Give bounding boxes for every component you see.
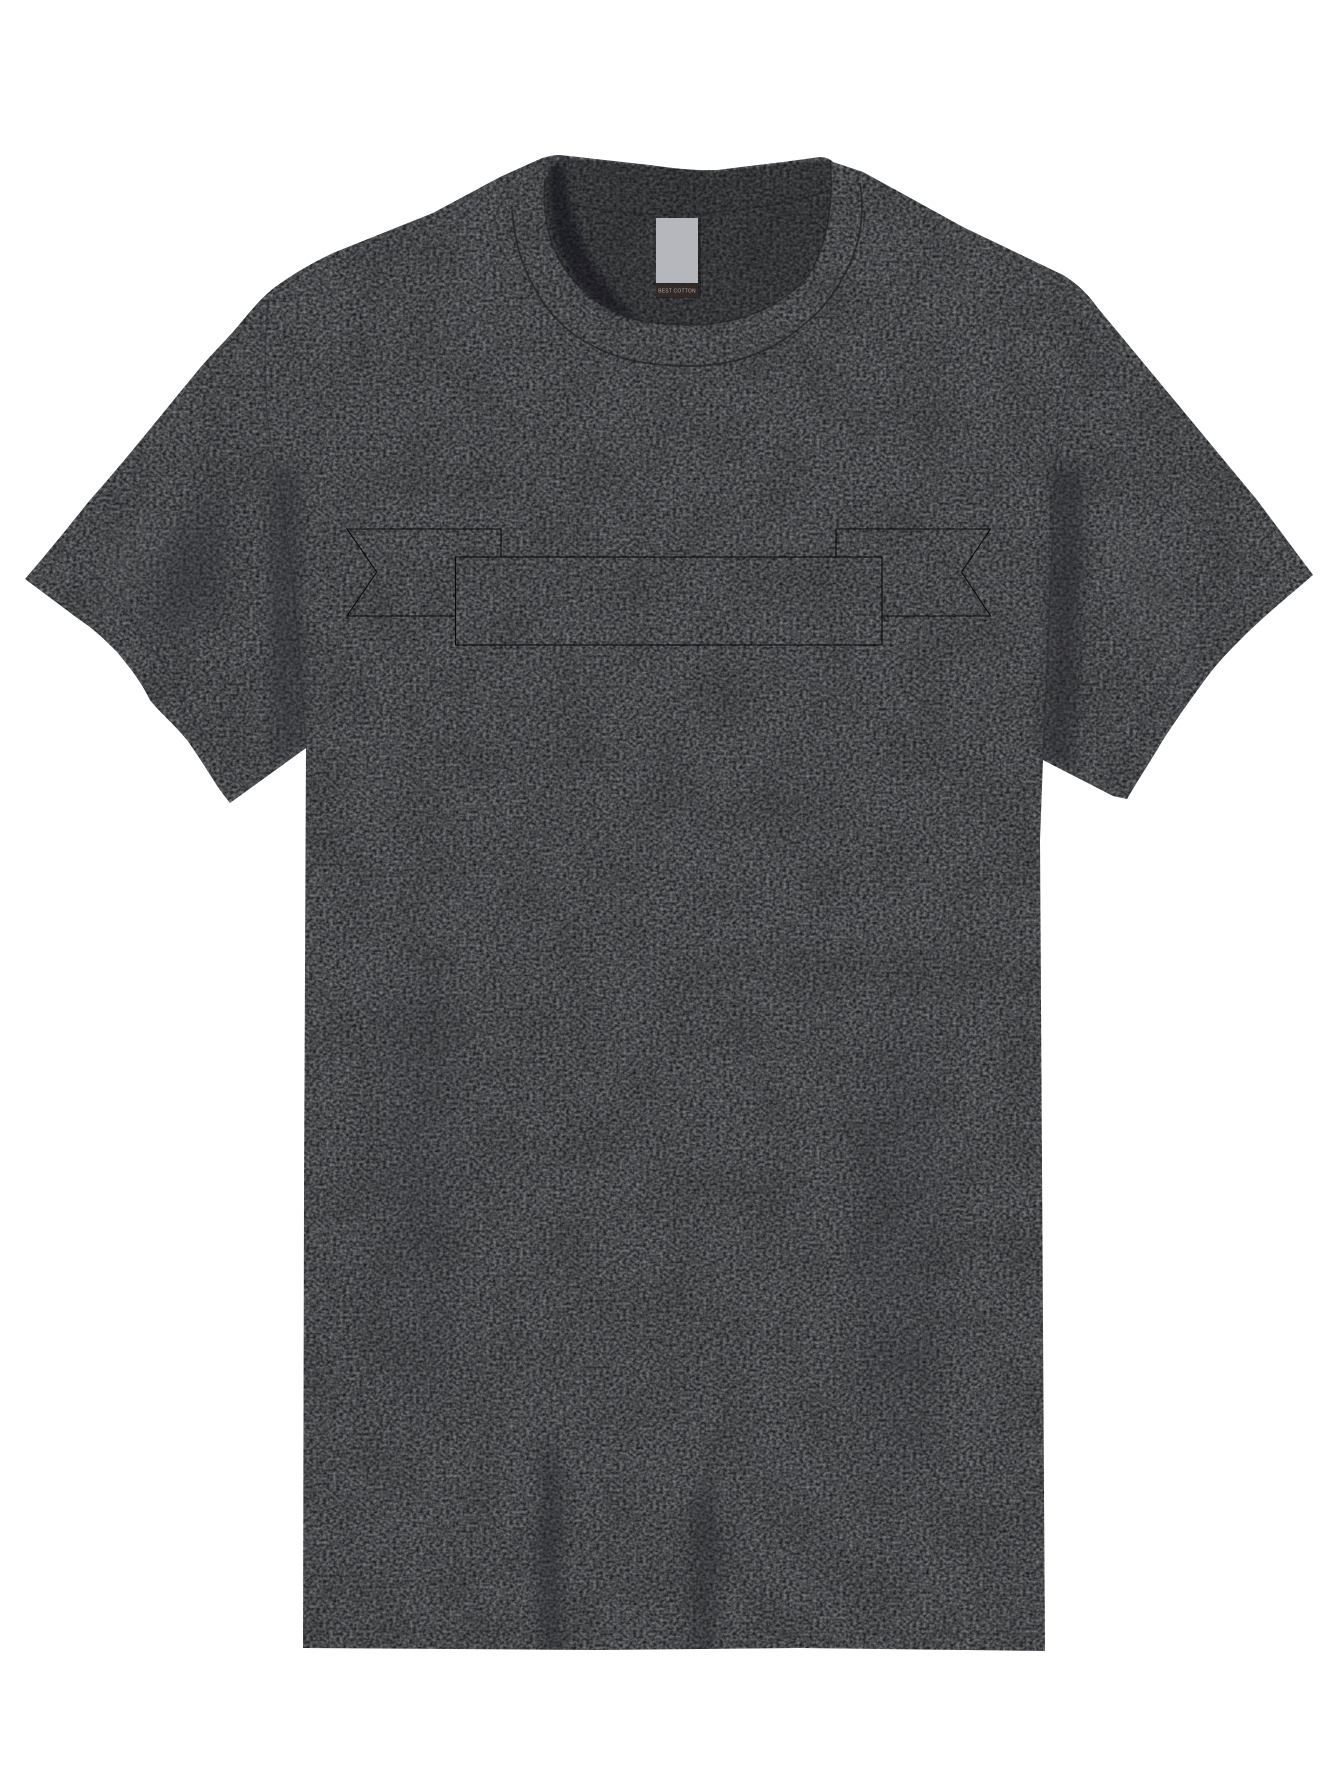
inner collar edge bbox=[544, 160, 831, 325]
sleeve seams and hems bbox=[58, 300, 1285, 1634]
fabric mottling bbox=[64, 160, 1266, 1651]
inner back neck bbox=[544, 157, 831, 325]
fabric shading folds bbox=[76, 470, 1219, 1680]
neck label bbox=[656, 218, 701, 298]
label shadow bbox=[656, 218, 701, 298]
label tab text: BEST COTTON bbox=[658, 288, 696, 294]
ribbon banner outline bbox=[347, 529, 990, 645]
back band stitch bbox=[550, 190, 830, 214]
outer collar seam bbox=[512, 183, 862, 366]
right ribbon tail bbox=[836, 529, 990, 616]
silver label bbox=[656, 218, 698, 283]
collar and inner neck bbox=[512, 157, 862, 366]
brown size tab bbox=[656, 284, 698, 297]
main banner panel bbox=[456, 557, 882, 645]
back neck band shadow bbox=[549, 160, 640, 320]
left ribbon tail bbox=[347, 529, 501, 616]
